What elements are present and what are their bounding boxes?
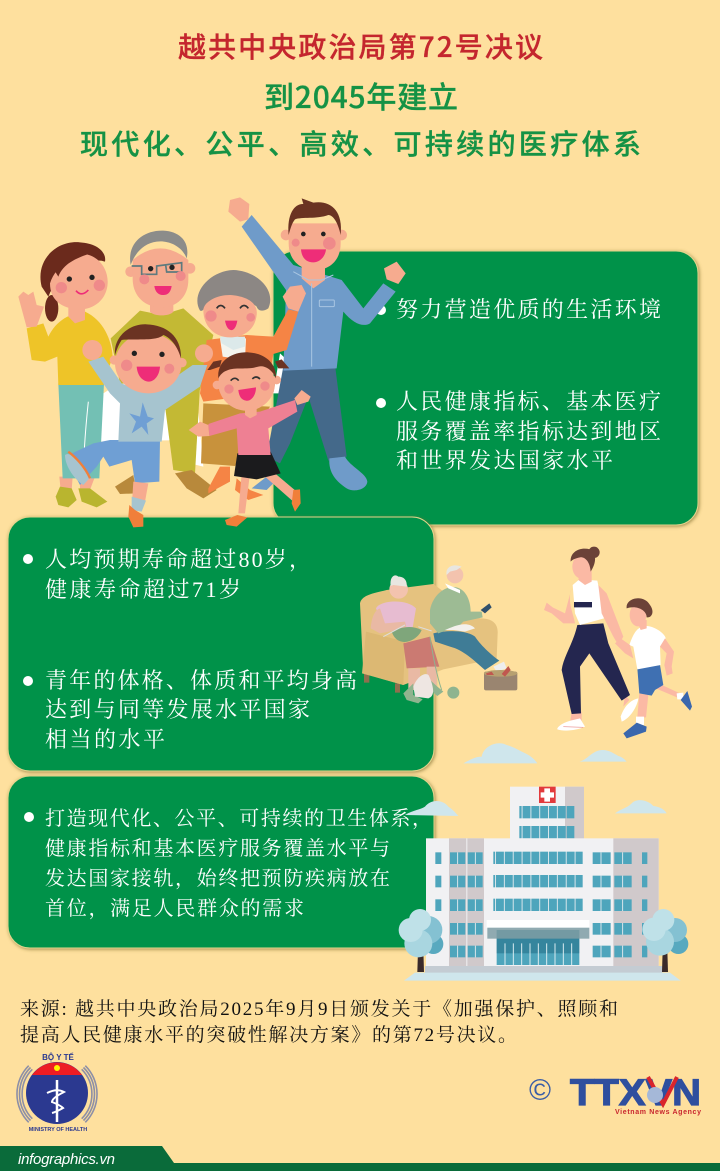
logo: TTXVN: TTXVN [570, 1072, 701, 1113]
heading: goal description: 现代化、公平、高效、可持续的医疗体系 [80, 123, 641, 163]
illustration: mother and son jogging [463, 547, 692, 763]
clouds [463, 743, 627, 763]
entrance [487, 920, 589, 965]
tree right [642, 909, 688, 972]
copyright symbol: © [529, 1074, 551, 1107]
icon: red cross [539, 787, 556, 803]
logo: Ministry of Health: BỘ Y TẾ [42, 1052, 75, 1062]
illustration: hospital [399, 787, 688, 981]
logo: TTXVN: Vietnam News Agency [615, 1109, 701, 1116]
windows [435, 852, 647, 957]
source note: 提高人民健康水平的突破性解决方案》的第72号决议。 [20, 1024, 517, 1046]
mother jogger [544, 547, 638, 731]
panel: modern health system: 打造现代化、公平、可持续的卫生体系， [45, 807, 432, 830]
logo: Ministry of Health: MINISTRY OF HEALTH [29, 1127, 87, 1133]
footer band [0, 1146, 720, 1171]
old woman [371, 575, 459, 703]
panel: living environment and health indicators: 努力营造优质的生活环境 [396, 297, 661, 322]
panel: modern health system [8, 776, 434, 948]
panel: modern health system: 发达国家接轨，始终把预防疾病放在 [45, 867, 390, 890]
panel: living environment and health indicators [273, 251, 698, 525]
grandmother [197, 270, 306, 500]
title [80, 26, 641, 163]
main building [426, 838, 659, 967]
panel: life expectancy and youth physique: 达到与同等发展水平国家 [45, 697, 310, 722]
boy jogger [615, 598, 692, 738]
panel: life expectancy and youth physique: 人均预期寿命超过80岁， [45, 547, 311, 573]
old man [430, 565, 517, 690]
heading: resolution name: 越共中央政治局第72号决议 [178, 26, 543, 66]
illustration: elderly couple on sofa [360, 565, 517, 703]
mother [18, 242, 113, 507]
panel: life expectancy and youth physique: 相当的水平 [45, 727, 165, 752]
father [228, 197, 406, 490]
panel: living environment and health indicators: 服务覆盖率指标达到地区 [396, 419, 661, 444]
panel: modern health system: 首位，满足人民群众的需求 [45, 897, 304, 920]
panel: living environment and health indicators: 人民健康指标、基本医疗 [396, 389, 661, 414]
panel: living environment and health indicators: 和世界发达国家水平 [396, 448, 613, 473]
source note: 来源: 越共中央政治局2025年9月9日颁发关于《加强保护、照顾和 [20, 998, 618, 1020]
ground [425, 966, 662, 973]
panel: life expectancy and youth physique: 健康寿命超过71岁 [45, 577, 241, 602]
heading: goal year: 到2045年建立 [264, 73, 458, 117]
clouds [405, 800, 667, 816]
boy [65, 324, 213, 527]
panel: modern health system: 健康指标和基本医疗服务覆盖水平与 [45, 837, 390, 860]
logo: Ministry of Health [17, 1052, 97, 1133]
illustration: family group [18, 197, 406, 527]
grandfather [111, 231, 217, 498]
tree left [399, 909, 443, 972]
tower [510, 787, 584, 840]
footer band: infographics.vn [18, 1151, 115, 1168]
panel: life expectancy and youth physique [8, 517, 434, 771]
panel: life expectancy and youth physique: 青年的体格、体质和平均身高 [45, 668, 357, 693]
source note [20, 998, 618, 1046]
girl [189, 352, 311, 527]
